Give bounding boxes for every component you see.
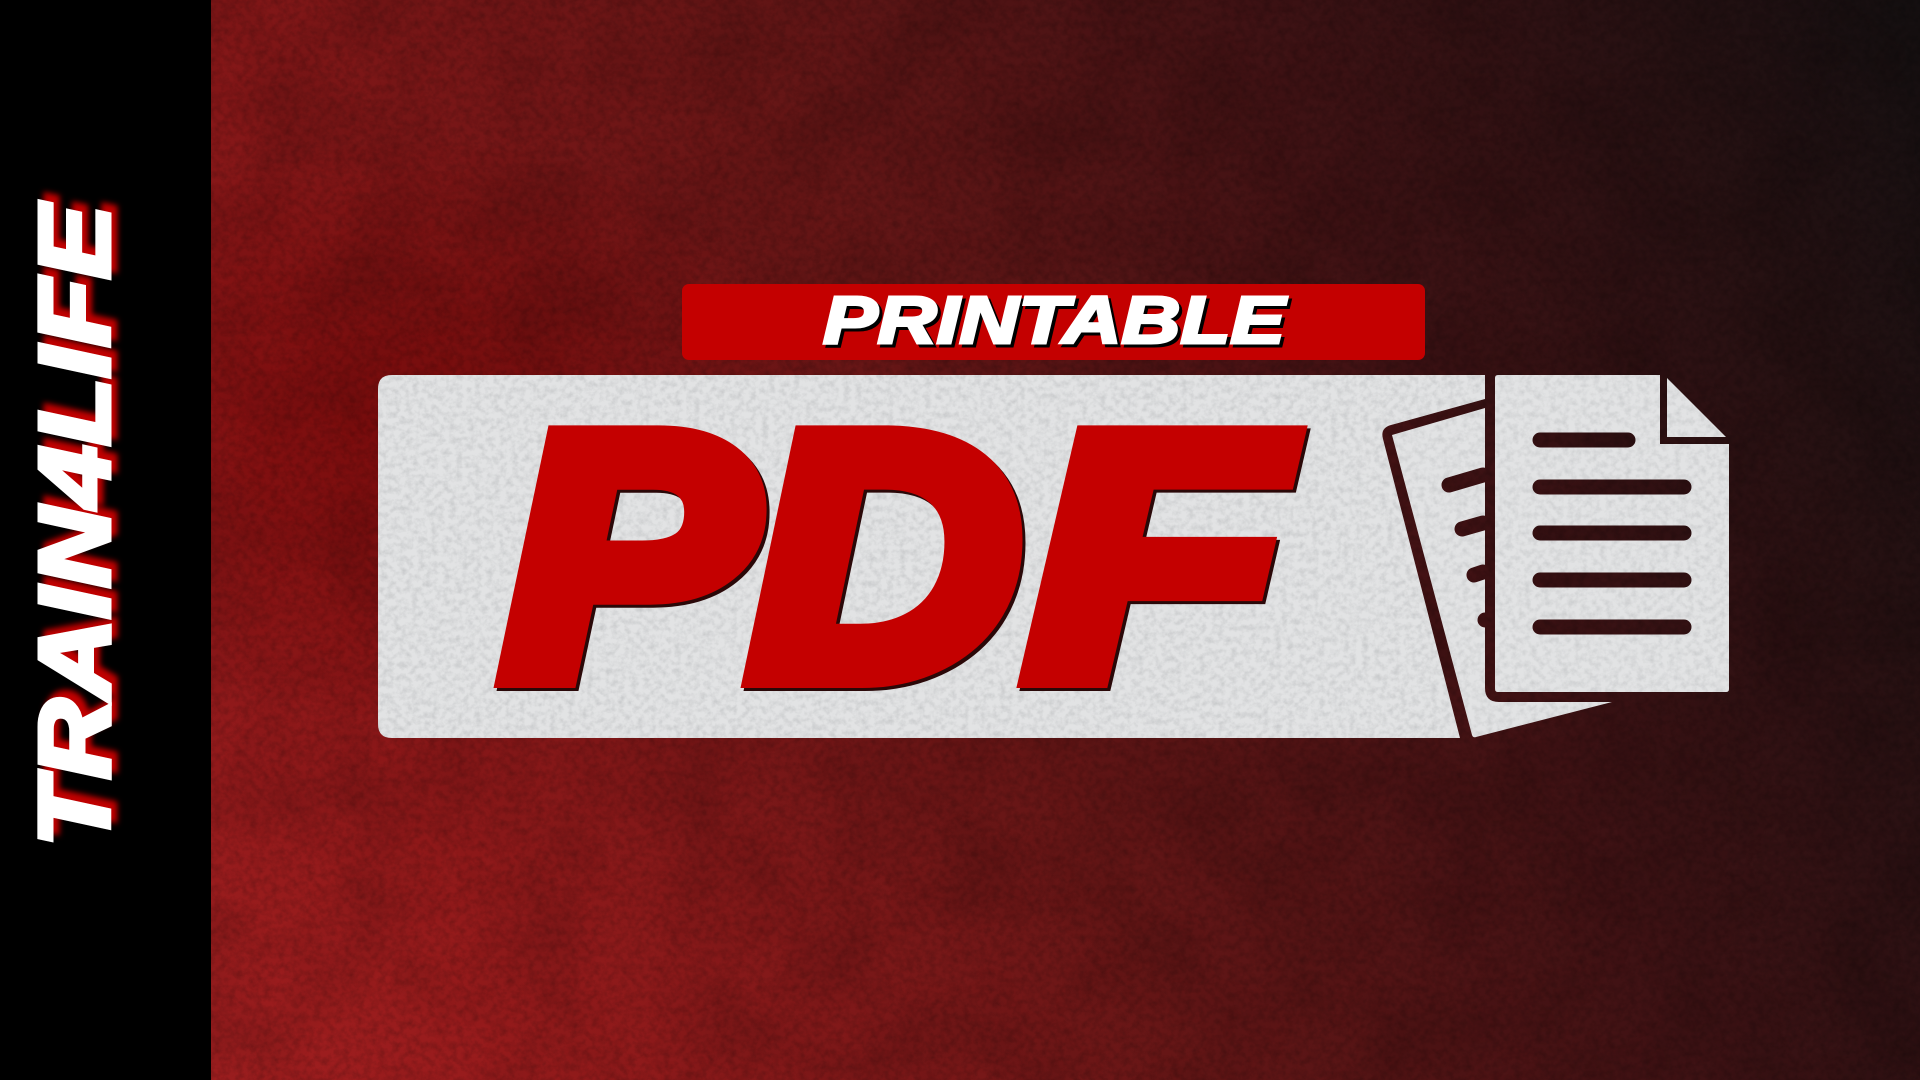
sidebar: black brand strip — [0, 0, 211, 1080]
heading: PDF: D — [751, 364, 1019, 748]
panel: white textured PDF card — [378, 375, 1485, 738]
heading: PDF: F — [1028, 364, 1292, 748]
banner: PRINTABLE: PRINTABLE — [823, 283, 1288, 358]
brand wordmark: TRAIN4LIFE: TRAIN4LIFE — [19, 201, 131, 847]
banner: PRINTABLE — [682, 283, 1425, 360]
icon: stacked document pages — [1382, 375, 1729, 738]
heading: PDF: P — [504, 364, 754, 748]
